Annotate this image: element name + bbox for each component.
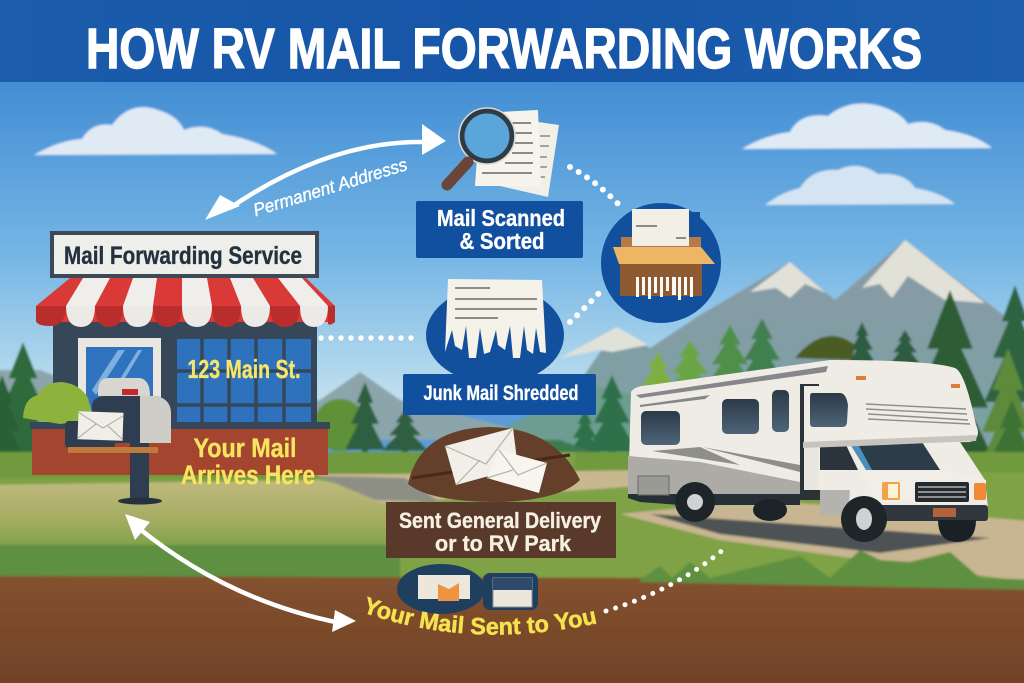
cab and hood xyxy=(820,442,988,515)
arrowhead to scanner xyxy=(422,124,446,155)
overcab underside xyxy=(803,435,977,448)
grille vent xyxy=(638,476,669,495)
label: sent general delivery or to RV park: Sent General Delivery xyxy=(399,508,602,533)
icon: magnifier over documents xyxy=(447,108,559,197)
arrowhead to store xyxy=(205,195,240,220)
cloud top right xyxy=(742,104,992,149)
far front wheel xyxy=(938,520,976,542)
small envelope xyxy=(487,450,547,493)
marker lights xyxy=(856,376,960,388)
label: junk mail shredded: Junk Mail Shredded xyxy=(424,382,578,405)
headlights xyxy=(882,482,986,500)
front wheel xyxy=(841,496,887,542)
trees left xyxy=(0,342,600,475)
paper entering shredder xyxy=(632,209,689,246)
icon: envelopes on brown mound xyxy=(408,427,580,502)
label: sent general delivery or to RV park: or to RV Park xyxy=(435,531,572,556)
arrow: permanent address xyxy=(205,124,446,220)
hood xyxy=(858,470,986,502)
trees right xyxy=(568,285,1024,500)
RV motorhome xyxy=(628,360,988,542)
rear wheel xyxy=(675,482,715,522)
label: mail scanned and sorted xyxy=(416,201,583,258)
cloud lower right xyxy=(765,166,955,205)
coach body xyxy=(628,360,978,500)
base caption: Your Mail xyxy=(194,433,296,463)
rear skirt xyxy=(628,494,800,505)
shredder box xyxy=(620,258,702,296)
overcab vents xyxy=(866,404,970,424)
double-headed arrow: mailbox to you xyxy=(125,514,356,632)
dotted connector: you to RV xyxy=(606,549,724,611)
letter sheet xyxy=(418,575,470,599)
envelope xyxy=(78,411,123,441)
brick base xyxy=(30,422,330,475)
label: junk mail shredded xyxy=(403,374,596,415)
dotted connector: store to junk xyxy=(321,335,420,341)
torn sheet xyxy=(445,279,546,358)
cloud left xyxy=(34,107,277,155)
post xyxy=(130,440,149,500)
lower grey stripe xyxy=(628,456,800,498)
lower door xyxy=(820,490,850,515)
shop wall xyxy=(53,320,317,430)
dotted connector: scanner to shredder xyxy=(570,167,622,208)
arrow label: Permanent Addresss xyxy=(251,154,410,220)
mountains xyxy=(0,240,1024,450)
dotted connector: shredder to junk xyxy=(570,291,601,322)
label: mail scanned and sorted: Mail Scanned xyxy=(437,205,565,231)
large envelope xyxy=(445,428,518,485)
door window xyxy=(78,338,161,430)
magnifier lens xyxy=(462,111,512,161)
grass and ground bands xyxy=(0,452,1024,582)
label: mail scanned and sorted: & Sorted xyxy=(460,228,544,254)
front grille xyxy=(915,482,969,502)
windshield xyxy=(852,442,940,470)
sign text: Mail Forwarding Service xyxy=(64,242,302,270)
tablet screen xyxy=(493,578,532,607)
magnifier handle xyxy=(447,162,468,185)
soil foreground xyxy=(0,576,1024,683)
storefront: mail forwarding service xyxy=(30,231,335,490)
shredded strips xyxy=(636,277,693,300)
sky xyxy=(0,70,1024,410)
road xyxy=(315,470,640,503)
icon: shredded junk mail xyxy=(426,279,564,384)
entry door frame xyxy=(800,384,820,500)
bush xyxy=(23,382,94,424)
coach windows xyxy=(641,390,848,445)
shop sign xyxy=(50,231,319,278)
title banner xyxy=(0,0,1024,82)
roof stripes xyxy=(636,366,828,407)
icon: mail on devices xyxy=(397,564,538,614)
box body xyxy=(92,396,171,443)
address text: 123 Main St. xyxy=(188,354,300,384)
back page xyxy=(500,122,559,197)
rear flag box xyxy=(98,378,150,396)
mailbox with envelope xyxy=(65,378,171,504)
grass tufts xyxy=(640,550,1024,590)
far rear wheel xyxy=(753,499,787,521)
caption: your mail sent to you: Your Mail Sent to You xyxy=(367,596,596,635)
icon: shredder in circle xyxy=(601,203,721,323)
label: sent general delivery or to RV park xyxy=(386,502,616,558)
shop window with address xyxy=(177,339,311,425)
base caption line two: Arrives Here xyxy=(181,460,315,490)
front page xyxy=(475,110,541,186)
awning xyxy=(36,278,335,327)
bumper with plate xyxy=(878,505,988,521)
